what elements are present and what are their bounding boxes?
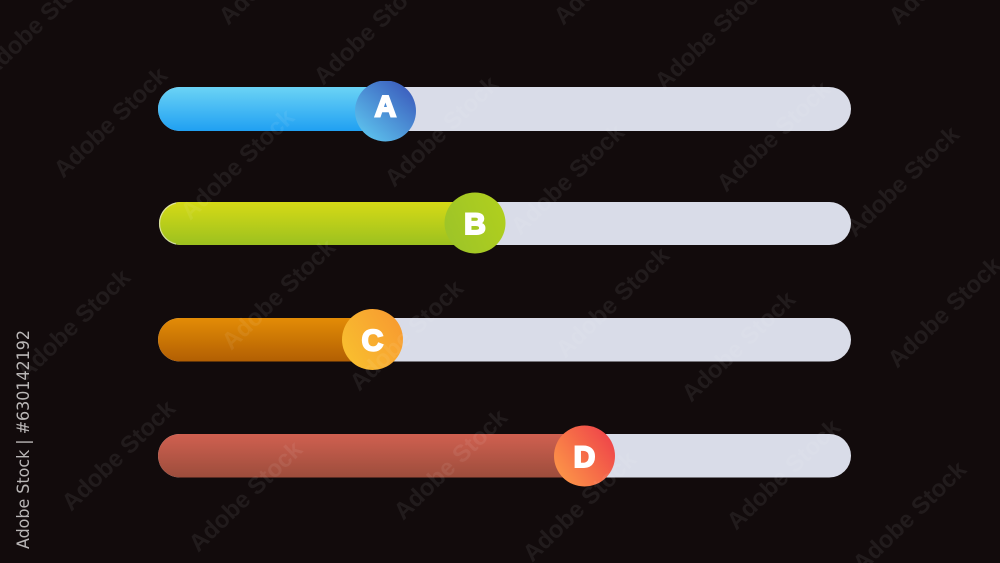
watermark pattern: Adobe Stock xyxy=(551,241,675,363)
watermark pattern: Adobe Stock xyxy=(506,118,630,240)
knob C xyxy=(342,309,403,370)
slider A xyxy=(158,80,851,142)
knob C: C xyxy=(362,324,383,358)
slider D xyxy=(158,426,851,486)
stock id label: Adobe Stock | #630142192 xyxy=(14,330,33,549)
slider B xyxy=(159,192,851,254)
watermark pattern: Adobe Stock xyxy=(677,285,801,407)
track B xyxy=(159,202,851,245)
slider C xyxy=(158,309,851,370)
watermark pattern: Adobe Stock xyxy=(12,263,136,385)
watermark pattern: Adobe Stock xyxy=(217,233,341,355)
watermark pattern: Adobe Stock xyxy=(49,61,173,183)
watermark pattern: Adobe Stock xyxy=(184,435,308,557)
watermark pattern: Adobe Stock xyxy=(380,70,504,192)
knob A xyxy=(355,80,416,142)
watermark pattern: Adobe Stock xyxy=(841,120,965,242)
track C xyxy=(158,318,851,362)
watermark pattern: Adobe Stock xyxy=(712,75,836,197)
watermark pattern: Adobe Stock xyxy=(57,394,181,516)
fill C xyxy=(158,318,378,362)
knob B xyxy=(444,192,506,254)
knob B: B xyxy=(464,208,486,241)
fill D xyxy=(158,434,588,478)
knob D: D xyxy=(574,441,595,474)
knob A: A xyxy=(375,90,396,124)
watermark pattern: Adobe Stock xyxy=(176,103,300,225)
track D xyxy=(158,434,851,478)
track A xyxy=(158,87,851,131)
watermark pattern: Adobe Stock xyxy=(389,403,513,525)
knob D xyxy=(554,426,615,486)
fill B xyxy=(159,202,479,245)
fill A xyxy=(158,87,408,131)
watermark pattern: Adobe Stock xyxy=(345,274,469,396)
fill B left edge highlight xyxy=(160,203,176,244)
watermark pattern: Adobe Stock xyxy=(722,413,846,535)
